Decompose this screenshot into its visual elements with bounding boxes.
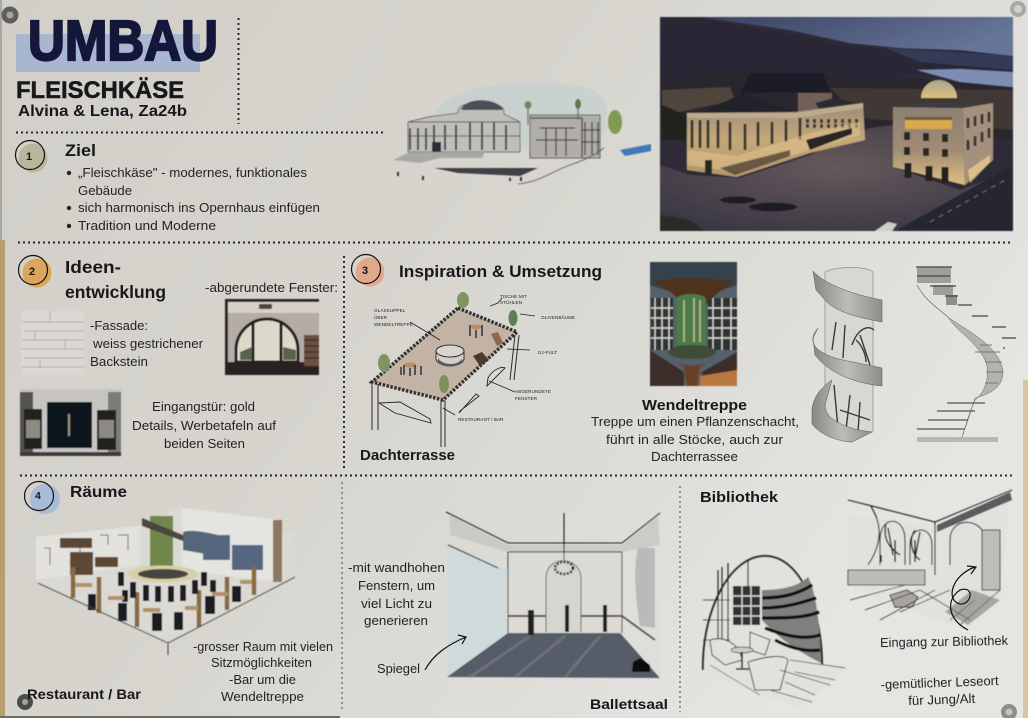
text: ballet hall windows: Fenstern, um — [358, 578, 435, 593]
bullet list: Gebäude — [78, 183, 132, 198]
description: restaurant: -Bar um die — [229, 672, 296, 687]
sketch annotations: DJ-PULT — [538, 350, 557, 355]
heading: Ideenentwicklung — [65, 257, 166, 302]
panel: Räume — [24, 482, 1012, 712]
description: Wendeltreppe: Treppe um einen Pflanzenschacht, — [591, 414, 799, 429]
text: entrance door — [132, 399, 276, 451]
label: rounded windows: -abgerundete Fenster: — [205, 280, 338, 295]
arrow: library entrance — [951, 566, 976, 630]
photo: arched window — [225, 299, 319, 375]
badge 3: 3 — [362, 265, 368, 277]
badge 2 — [18, 256, 52, 288]
sketch annotations: STÜHLEN — [500, 299, 522, 305]
badge 4: 4 — [35, 490, 41, 502]
bullet list — [67, 165, 320, 233]
description: restaurant — [193, 639, 333, 704]
pin: top left — [2, 6, 18, 24]
sketch: library entrance hall — [848, 490, 1012, 625]
sketch annotations: FENSTER — [515, 396, 538, 401]
description: library: -gemütlicher Leseort — [880, 673, 999, 692]
photo: plant shaft atrium — [650, 262, 737, 386]
title: UMBAU: UMBAU — [28, 9, 218, 73]
text: facade: Backstein — [90, 354, 148, 369]
heading: Ideenentwicklung: entwicklung — [65, 282, 166, 302]
text: facade: weiss gestrichener — [92, 336, 204, 351]
bullet list: „Fleischkäse" - modernes, funktionales — [78, 165, 308, 180]
sketch annotations: ABGERUNDETE — [515, 389, 551, 394]
road — [895, 165, 1013, 231]
heading: Räume: Räume — [70, 484, 127, 501]
sketch annotations: OLIVENBÄUME — [541, 314, 575, 320]
sketch: roof terrace — [372, 292, 575, 447]
heading: Ideenentwicklung: Ideen- — [65, 257, 121, 277]
sketch annotations: TISCHE MIT — [500, 294, 527, 299]
text: ballet hall windows: viel Licht zu — [361, 596, 432, 611]
sketch: opera house watercolour — [393, 83, 651, 184]
heading: Ziel: Ziel — [65, 141, 96, 160]
description: restaurant: -grosser Raum mit vielen — [193, 639, 333, 654]
bullet list: Tradition und Moderne — [78, 218, 216, 233]
plaza — [660, 125, 1013, 231]
text: facade: -Fassade: — [90, 318, 148, 333]
shrubs — [720, 196, 756, 204]
panel: Ziel — [16, 140, 320, 233]
label: Wendeltreppe — [591, 398, 799, 464]
panel: Inspiration und Umsetzung — [352, 254, 1016, 464]
badge 3 — [352, 254, 384, 286]
sketch annotations: ÜBER — [374, 314, 388, 320]
label: Dachterrasse: Dachterrasse — [360, 448, 455, 464]
text: ballet hall windows — [348, 560, 445, 628]
sketch annotations: WENDELTREPPE — [374, 322, 413, 327]
sketch: spiral stair with plants — [812, 268, 882, 442]
label: Ballettsaal: Ballettsaal — [590, 696, 668, 712]
bullet list: sich harmonisch ins Opernhaus einfügen — [78, 200, 320, 215]
description: Wendeltreppe: führt in alle Stöcke, auch zur — [606, 432, 784, 447]
sketch: restaurant and bar — [36, 505, 295, 655]
badge 1: 1 — [26, 151, 32, 163]
text: entrance door: Details, Werbetafeln auf — [132, 418, 276, 433]
text: ballet hall windows: -mit wandhohen — [348, 560, 445, 575]
subtitle: Fleischkäse: FLEISCHKÄSE — [16, 77, 184, 104]
description: Wendeltreppe: Dachterrassee — [651, 449, 738, 464]
description: restaurant: Sitzmöglichkeiten — [211, 655, 312, 670]
description: restaurant: Wendeltreppe — [221, 689, 304, 704]
text: entrance door: Eingangstür: gold — [152, 399, 255, 414]
right building — [893, 107, 965, 185]
label: mirror: Spiegel — [377, 661, 420, 676]
photo: opera house rendering at dusk — [660, 17, 1013, 231]
arrow: mirror — [425, 635, 466, 670]
sketch: ballet hall — [446, 512, 660, 678]
text: ballet hall windows: generieren — [364, 613, 428, 628]
label: Wendeltreppe: Wendeltreppe — [642, 398, 747, 414]
title highlight bar — [16, 34, 200, 72]
description: library — [880, 673, 1000, 709]
authors: Alvina & Lena, Za24b — [18, 103, 187, 120]
sketch annotations: RESTAURANT / BAR — [458, 417, 504, 422]
heading: Inspiration und Umsetzung: Inspiration & Umsetzung — [399, 262, 602, 281]
description: Wendeltreppe — [591, 414, 799, 464]
photo: entrance door — [20, 389, 121, 456]
sketch annotations: GLASKUPPEL — [374, 308, 406, 313]
label: Restaurant / Bar: Restaurant / Bar — [27, 686, 142, 702]
sketch: spiral stair side view — [916, 267, 1016, 442]
sketch: library reading room — [703, 556, 845, 708]
badge 4 — [24, 482, 60, 514]
badge 1 — [16, 140, 48, 172]
text: entrance door: beiden Seiten — [164, 436, 245, 451]
label: library entrance: Eingang zur Bibliothek — [880, 633, 1009, 650]
pin: top right — [1010, 1, 1026, 17]
pin: bottom right — [1001, 704, 1017, 718]
sketch annotations — [374, 294, 575, 422]
description: library: für Jung/Alt — [908, 691, 976, 708]
pin: bottom left — [17, 694, 33, 710]
badge 2: 2 — [29, 266, 35, 278]
texture: white painted brick — [21, 311, 84, 375]
heading: Bibliothek: Bibliothek — [700, 490, 779, 506]
title block — [16, 9, 218, 120]
text: facade — [90, 318, 204, 369]
panel: Ideenentwicklung — [18, 256, 338, 456]
left building — [740, 73, 830, 93]
